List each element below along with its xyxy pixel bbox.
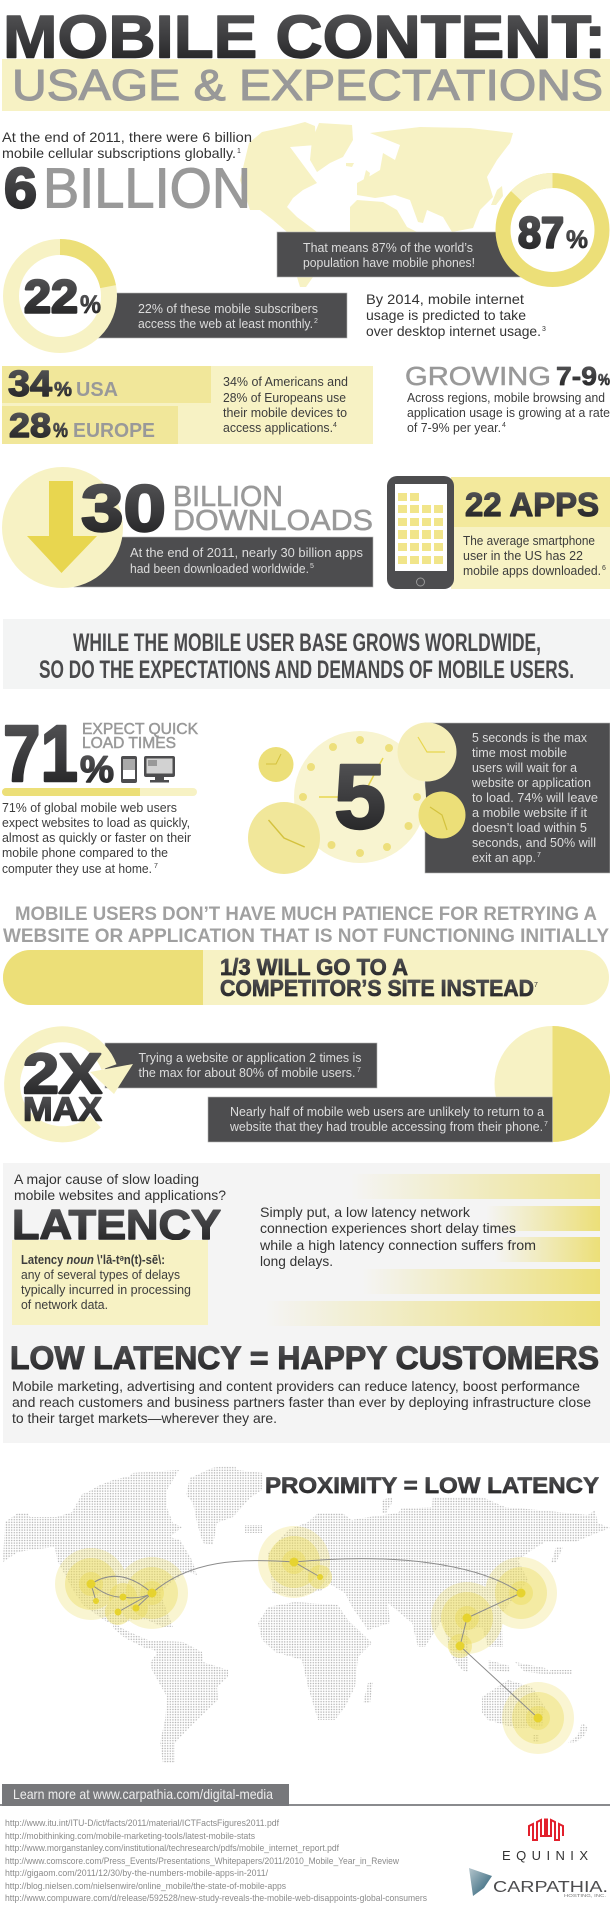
- stat: growing 7-9 percent: [405, 361, 610, 435]
- callout: unlikely to return: Nearly half of mobile web users are unlikely to return to a: [230, 1104, 545, 1119]
- text: load expectation: 71% of global mobile web users: [2, 800, 177, 815]
- panel: USA and Europe: 34% of Americans and: [223, 374, 348, 389]
- icon: middle right clock: [418, 792, 466, 838]
- donut: 87 percent: %: [566, 226, 588, 254]
- callout: 5 seconds: 5 seconds is the max: [472, 730, 587, 745]
- heading: patience: WEBSITE OR APPLICATION THAT IS NOT FUNCTIONING INITIALLY: [3, 926, 609, 947]
- callout: 5 seconds: [425, 723, 610, 873]
- callout: 5 seconds: exit an app.: [472, 850, 536, 865]
- panel: 22 apps: 22 APPS: [465, 486, 599, 523]
- text: load expectation: 7: [154, 863, 158, 870]
- panel: USA and Europe: access applications.: [223, 420, 333, 435]
- pill: one third: COMPETITOR’S SITE INSTEAD: [220, 975, 534, 1001]
- intro text: [2, 129, 252, 161]
- intro text: At the end of 2011, there were 6 billion: [2, 129, 252, 145]
- heading: patience: MOBILE USERS DON’T HAVE MUCH PATIENCE FOR RETRYING A: [15, 904, 597, 925]
- title: MOBILE CONTENT:: [3, 4, 606, 70]
- text: load expectation: mobile phone compared to the: [2, 845, 168, 860]
- donut: 22 percent: 22: [24, 270, 78, 322]
- references list: http://www.itu.int/ITU-D/ict/facts/2011/material/ICTFactsFigures2011.pdf: [5, 1818, 279, 1829]
- callout: 5 seconds: website or application: [471, 775, 591, 790]
- stat: 71 percent: EXPECT QUICK: [82, 721, 199, 738]
- callout: 22 percent: access the web at least monthly.: [138, 316, 313, 331]
- stat: 71 percent: LOAD TIMES: [82, 735, 176, 752]
- intro text: 1: [237, 148, 241, 155]
- text: load expectation: [2, 800, 192, 876]
- light world map: [240, 122, 513, 287]
- panel: 22 apps: 6: [602, 565, 606, 572]
- progress bar: 71 percent: [2, 788, 197, 796]
- callout: 2 times: [105, 1043, 377, 1088]
- callout: 5 seconds: a mobile website if it: [472, 805, 587, 820]
- panel: latency: mobile websites and applications?: [14, 1187, 226, 1203]
- stat: 30 billion downloads: DOWNLOADS: [173, 505, 373, 537]
- callout: 87 percent: population have mobile phones!: [303, 255, 475, 270]
- donut: 87 percent: [503, 180, 602, 280]
- callout: 22 percent: 2: [314, 318, 318, 325]
- logo: Equinix: [502, 1820, 588, 1863]
- icon: phone: [121, 756, 137, 783]
- callout: downloads text: [74, 537, 373, 587]
- logo: Carpathia: HOSTING, INC.: [564, 1893, 606, 1898]
- panel: 22 apps: The average smartphone: [463, 533, 595, 548]
- panel: USA and Europe: EUROPE: [73, 420, 155, 442]
- map: data center nodes: [86, 1558, 542, 1722]
- footer: learn more: Learn more at www.carpathia.com/digital-media: [13, 1786, 273, 1802]
- references list: http://www.comscore.com/Press_Events/Presentations_Whitepapers/2011/2010_Mobile_Year_in_Review: [5, 1856, 399, 1867]
- references list: http://www.morganstanley.com/institutional/techresearch/pdfs/mobile_internet_report.pdf: [5, 1843, 339, 1854]
- heading: proximity: PROXIMITY = LOW LATENCY: [265, 1473, 599, 1498]
- callout: 2 times: the max for about 80% of mobile users.: [138, 1065, 356, 1080]
- panel: latency: while a high latency connection suffers from: [259, 1237, 536, 1253]
- text: 2014 prediction: usage is predicted to take: [366, 307, 526, 323]
- text: load expectation: expect websites to load as quickly,: [2, 815, 190, 830]
- stat: 30 billion downloads: [81, 471, 373, 545]
- heading: patience: [3, 904, 609, 947]
- logo: Carpathia: CARPATHIA.: [493, 1879, 608, 1896]
- callout: 2 times: Trying a website or application 2 times is: [138, 1050, 362, 1065]
- references list: http://gigaom.com/2011/12/30/by-the-numbers-mobile-apps-in-2011/: [5, 1868, 268, 1879]
- logo: Equinix: EQUINIX: [502, 1848, 588, 1863]
- callout: unlikely to return: website that they had trouble accessing from their phone.: [229, 1119, 543, 1134]
- panel: latency: Latency noun \'lā-tᵊn(t)-sē\:: [21, 1252, 165, 1267]
- map: data center glows: [55, 1526, 574, 1754]
- panel: USA and Europe: [2, 363, 373, 445]
- callout: 5 seconds: users will wait for a: [472, 760, 578, 775]
- panel: latency: LATENCY: [12, 1201, 221, 1248]
- subtitle band: USAGE & EXPECTATIONS: [12, 61, 603, 110]
- callout: unlikely to return: 7: [544, 1121, 548, 1128]
- icon: top right clock: [398, 722, 456, 782]
- references list: http://mobithinking.com/mobile-marketing-tools/latest-mobile-stats: [5, 1831, 255, 1842]
- panel: latency: [3, 1163, 610, 1443]
- donut: 22 percent: [11, 247, 109, 345]
- panel: USA and Europe: 28: [9, 407, 51, 445]
- callout: 22 percent: 22% of these mobile subscribers: [138, 301, 318, 316]
- panel: latency: and reach customers and business partners faster than ever by deploying infrastructure close: [12, 1394, 591, 1410]
- stat: growing 7-9 percent: GROWING: [405, 361, 551, 391]
- pill: one third: 7: [534, 982, 538, 989]
- panel: USA and Europe: %: [54, 379, 72, 401]
- stat: 6 billion: BILLION: [43, 156, 251, 220]
- text: load expectation: almost as quickly or faster on their: [2, 830, 192, 845]
- panel: latency: A major cause of slow loading: [14, 1171, 199, 1187]
- icon: desktop monitor: [144, 756, 175, 782]
- stat: 2X max: [23, 1042, 102, 1128]
- panel: USA and Europe: 28% of Europeans use: [223, 390, 346, 405]
- icon: large clock with 5: 5: [334, 746, 386, 848]
- callout: 5 seconds: 7: [537, 852, 541, 859]
- callout: 5 seconds: to load. 74% will leave: [472, 790, 598, 805]
- callout: 2 times: 7: [357, 1067, 361, 1074]
- icon: retry arrow: [12, 1034, 133, 1134]
- callout: downloads text: had been downloaded worldwide.: [130, 561, 309, 576]
- footer: learn more: [0, 1784, 610, 1806]
- callout: unlikely to return: [208, 1097, 552, 1142]
- icon: download arrow: [2, 467, 123, 588]
- panel: USA and Europe: %: [53, 420, 68, 442]
- panel: latency: connection experiences short delay times: [260, 1220, 516, 1236]
- text: 2014 prediction: By 2014, mobile internet: [366, 291, 524, 307]
- panel: latency: of network data.: [21, 1297, 108, 1312]
- panel: 22 apps: [451, 477, 610, 589]
- panel: USA and Europe: 34: [8, 363, 52, 404]
- stat: 71 percent: [3, 709, 199, 798]
- panel: USA and Europe: USA: [76, 379, 118, 401]
- dotted world map: [0, 1460, 610, 1770]
- stat: growing 7-9 percent: of 7-9% per year.: [407, 420, 501, 435]
- text: 2014 prediction: [366, 291, 546, 339]
- references list: [5, 1818, 427, 1904]
- stat: 71 percent: %: [80, 749, 114, 790]
- panel: USA and Europe: 4: [333, 422, 337, 429]
- callout: 87 percent: [277, 232, 521, 277]
- text: 2014 prediction: 3: [542, 326, 546, 333]
- callout: 5 seconds: seconds, and 50% will: [472, 835, 596, 850]
- intro text: mobile cellular subscriptions globally.: [2, 145, 236, 161]
- panel: latency: any of several types of delays: [21, 1267, 180, 1282]
- panel: 22 apps: user in the US has 22: [463, 548, 583, 563]
- callout: 5 seconds: time most mobile: [472, 745, 567, 760]
- stat: 2X max: 2X: [23, 1042, 102, 1106]
- panel: latency: long delays.: [260, 1253, 333, 1269]
- stat: 6 billion: 6: [4, 156, 37, 220]
- references list: http://www.compuware.com/d/release/592528/new-study-reveals-the-mobile-web-disappoints-global-consumers: [5, 1893, 427, 1904]
- stat: 30 billion downloads: 30: [81, 471, 166, 545]
- panel: latency: to their target markets—wherever they are.: [12, 1410, 277, 1426]
- icon: smartphone: [387, 476, 454, 589]
- panel: latency: typically incurred in processing: [21, 1282, 191, 1297]
- pie: half of users: [494, 1026, 610, 1142]
- stat: growing 7-9 percent: 7-9: [556, 361, 597, 391]
- panel: 22 apps: mobile apps downloaded.: [463, 563, 601, 578]
- icon: large clock with 5: [294, 731, 426, 863]
- stat: growing 7-9 percent: 4: [502, 422, 506, 429]
- callout: downloads text: At the end of 2011, nearly 30 billion apps: [130, 545, 363, 560]
- callout: 87 percent: That means 87% of the world’s: [303, 240, 473, 255]
- panel: latency: LOW LATENCY = HAPPY CUSTOMERS: [10, 1340, 599, 1376]
- icon: bottom left clock: [248, 802, 320, 874]
- stat: 2X max: MAX: [23, 1090, 102, 1128]
- callout: downloads text: 5: [310, 563, 314, 570]
- callout: 5 seconds: doesn’t load within 5: [472, 820, 587, 835]
- panel: USA and Europe: their mobile devices to: [223, 405, 347, 420]
- map: network links: [91, 1559, 538, 1718]
- panel: latency: Simply put, a low latency network: [260, 1204, 471, 1220]
- stat: 71 percent: 71: [3, 709, 78, 798]
- text: load expectation: computer they use at home.: [2, 861, 152, 876]
- panel: latency: Mobile marketing, advertising and content providers can reduce latency, boost performance: [12, 1378, 580, 1394]
- pill: one third: 1/3 WILL GO TO A: [220, 954, 408, 980]
- callout: 22 percent: [97, 293, 347, 338]
- stat: 30 billion downloads: BILLION: [173, 481, 283, 513]
- icon: small clock: [258, 747, 294, 782]
- logo: Carpathia: [469, 1868, 608, 1898]
- donut: 22 percent: %: [80, 291, 101, 319]
- donut: 87 percent: 87: [518, 208, 564, 258]
- text: 2014 prediction: over desktop internet usage.: [366, 323, 541, 339]
- banner: expectations heading: [3, 619, 610, 689]
- pill: one third: [3, 950, 609, 1005]
- references list: http://blog.nielsen.com/nielsenwire/online_mobile/the-state-of-mobile-apps: [5, 1881, 286, 1892]
